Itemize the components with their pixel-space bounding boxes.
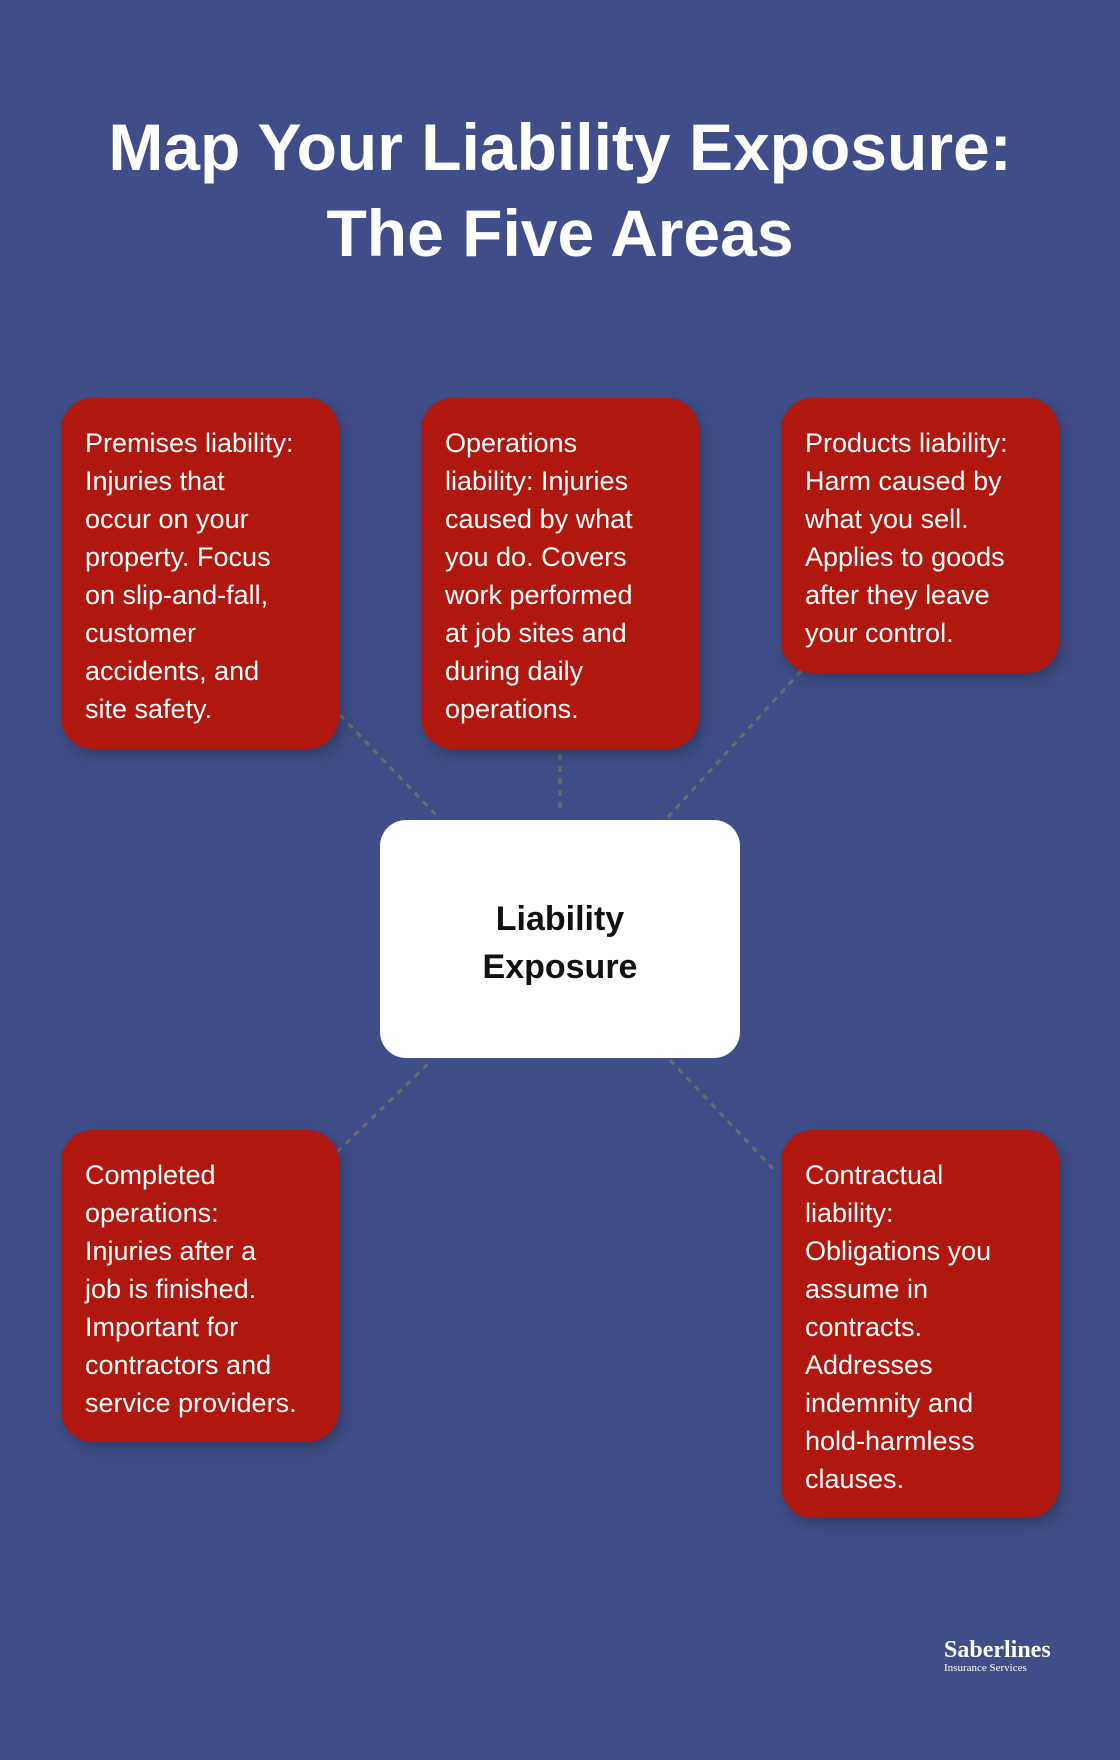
panel: contractual liability: Contractual (805, 1160, 943, 1190)
panel: products liability: after they leave (805, 580, 990, 610)
center node: Exposure (483, 948, 637, 986)
panel: contractual liability: Addresses (805, 1350, 933, 1380)
panel: operations liability: you do. Covers (445, 542, 627, 572)
panel: operations liability (421, 398, 699, 749)
panel: contractual liability: indemnity and (805, 1388, 973, 1418)
panel: premises liability: Injuries that (85, 466, 225, 496)
panel: contractual liability (781, 1130, 1059, 1518)
logo: Saberlines (944, 1637, 1051, 1663)
panel: premises liability: customer (85, 618, 196, 648)
title (108, 110, 1012, 270)
panel: operations liability: work performed (445, 580, 633, 610)
panel: contractual liability: assume in (805, 1274, 928, 1304)
panel: products liability (781, 398, 1059, 673)
panel: products liability: what you sell. (805, 504, 969, 534)
panel: premises liability: on slip-and-fall, (85, 580, 268, 610)
panel: completed operations: operations: (85, 1198, 219, 1228)
panel: premises liability: accidents, and (85, 656, 259, 686)
panel: completed operations: Injuries after a (85, 1236, 256, 1266)
panel: products liability: Harm caused by (805, 466, 1002, 496)
panel: premises liability: occur on your (85, 504, 249, 534)
panel: operations liability: operations. (445, 694, 579, 724)
panel: completed operations: service providers. (85, 1388, 297, 1418)
panel: contractual liability: Obligations you (805, 1236, 991, 1266)
panel: products liability: Products liability: (805, 428, 1008, 458)
panel: contractual liability: liability: (805, 1198, 894, 1228)
panel: products liability: your control. (805, 618, 954, 648)
panel: premises liability: property. Focus (85, 542, 271, 572)
panel: contractual liability: clauses. (805, 1464, 904, 1494)
panel: operations liability: at job sites and (445, 618, 627, 648)
panel: operations liability: liability: Injuries (445, 466, 628, 496)
panel: contractual liability: hold-harmless (805, 1426, 975, 1456)
panel: completed operations: Completed (85, 1160, 216, 1190)
panel: completed operations: contractors and (85, 1350, 271, 1380)
panel: premises liability (61, 398, 339, 749)
panel: completed operations (61, 1130, 339, 1442)
panel: contractual liability: contracts. (805, 1312, 922, 1342)
title: The Five Areas (326, 196, 794, 270)
panel: completed operations: job is finished. (85, 1274, 256, 1304)
panel: operations liability: Operations (445, 428, 577, 458)
panel: premises liability: site safety. (85, 694, 212, 724)
panel: operations liability: caused by what (445, 504, 633, 534)
center node (380, 820, 740, 1058)
panel: operations liability: during daily (445, 656, 583, 686)
logo: Insurance Services (944, 1662, 1027, 1674)
title: Map Your Liability Exposure: (108, 110, 1012, 184)
panel: products liability: Applies to goods (805, 542, 1005, 572)
panel: premises liability: Premises liability: (85, 428, 294, 458)
panel: completed operations: Important for (85, 1312, 238, 1342)
center node: Liability (496, 900, 624, 938)
